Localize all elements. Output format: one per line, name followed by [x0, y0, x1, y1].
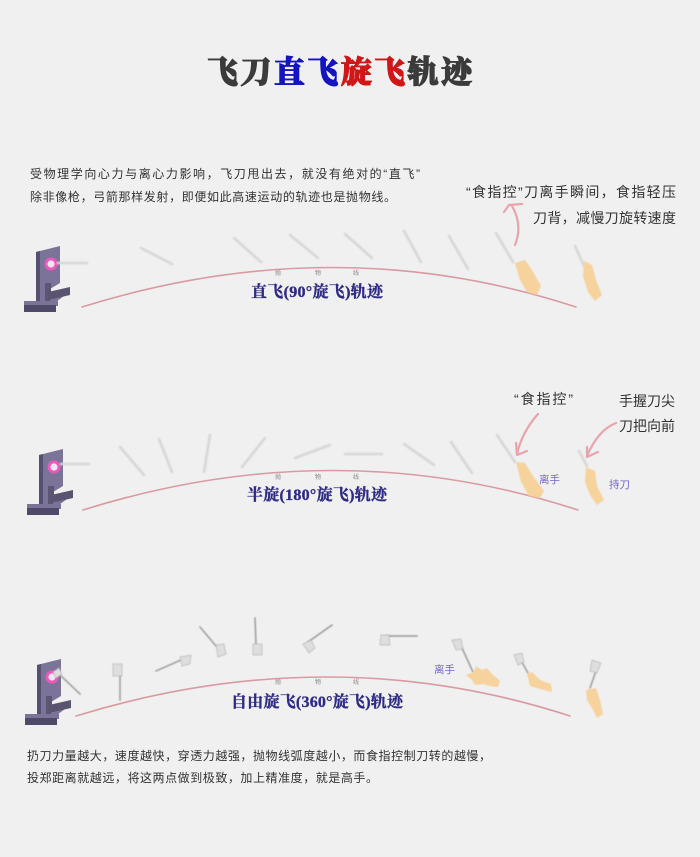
label: release: 离手: [539, 473, 560, 486]
parabola tiny labels: [275, 473, 359, 481]
knife in target: [58, 262, 87, 264]
hand: grip 1: [527, 672, 552, 692]
flying knives: [141, 231, 584, 269]
heading: half spin: 半旋(180°旋飞)轨迹: [247, 485, 388, 504]
hand: grip: [585, 467, 604, 505]
target stand: [24, 246, 70, 312]
callout: index finger control: 刀背，减慢刀旋转速度: [533, 210, 676, 226]
parabola tiny labels: 物: [315, 473, 321, 481]
parabola tiny labels: 物: [315, 269, 321, 277]
heading: free spin: 自由旋飞(360°旋飞)轨迹: [231, 692, 404, 711]
parabola tiny labels: 线: [353, 678, 359, 686]
spinning knives: [113, 618, 601, 700]
closing text: 扔刀力量越大，速度越快，穿透力越强，抛物线弧度越小，而食指控制刀转的越慢，: [27, 748, 491, 763]
parabola tiny labels: [275, 678, 359, 686]
trajectory curve: [76, 677, 570, 716]
parabola tiny labels: 线: [353, 269, 359, 277]
callout labels: [514, 391, 675, 434]
callout: index finger control: [466, 184, 676, 226]
parabola tiny labels: [275, 269, 359, 277]
knife in target: [53, 668, 80, 694]
arrow: grip: [587, 423, 616, 457]
callout labels: 刀把向前: [619, 418, 675, 434]
callout: index finger control: “食指控”刀离手瞬间，食指轻压: [466, 184, 676, 200]
parabola tiny labels: 抛: [275, 473, 281, 481]
hand: release: [515, 260, 541, 295]
title: 飞刀直飞旋飞轨迹: [207, 55, 475, 90]
parabola tiny labels: 线: [353, 473, 359, 481]
panel: half spin: [27, 391, 675, 515]
label: hold: 持刀: [609, 478, 630, 491]
closing text: 投郑距离就越远，将这两点做到极致，加上精准度，就是高手。: [27, 770, 378, 785]
panel: straight flight: [24, 184, 676, 312]
label: release: 离手: [434, 663, 455, 676]
hand: grip 2: [586, 688, 603, 718]
target stand: [25, 659, 71, 725]
flying knives: [120, 435, 587, 475]
callout labels: “食指控”: [514, 391, 573, 407]
parabola tiny labels: 抛: [275, 269, 281, 277]
callout labels: 手握刀尖: [619, 393, 675, 409]
hand: release: [516, 462, 544, 498]
trajectory curve: [83, 470, 578, 510]
intro text: 受物理学向心力与离心力影响，飞刀甩出去，就没有绝对的“直飞”: [30, 166, 420, 181]
hand: open release: [466, 666, 500, 687]
target stand: [27, 449, 73, 515]
heading: straight flight: 直飞(90°旋飞)轨迹: [251, 282, 384, 301]
intro text: [30, 166, 420, 204]
arrow: up: [504, 204, 522, 245]
intro text: 除非像枪，弓箭那样发射，即便如此高速运动的轨迹也是抛物线。: [30, 189, 396, 204]
arrow: index finger: [516, 414, 538, 455]
hand: grip: [583, 261, 602, 301]
panel: free spin: [25, 618, 603, 725]
knife in target: [61, 463, 89, 465]
trajectory curve: [82, 268, 576, 307]
parabola tiny labels: 抛: [275, 678, 281, 686]
closing text: [27, 748, 491, 785]
parabola tiny labels: 物: [315, 678, 321, 686]
